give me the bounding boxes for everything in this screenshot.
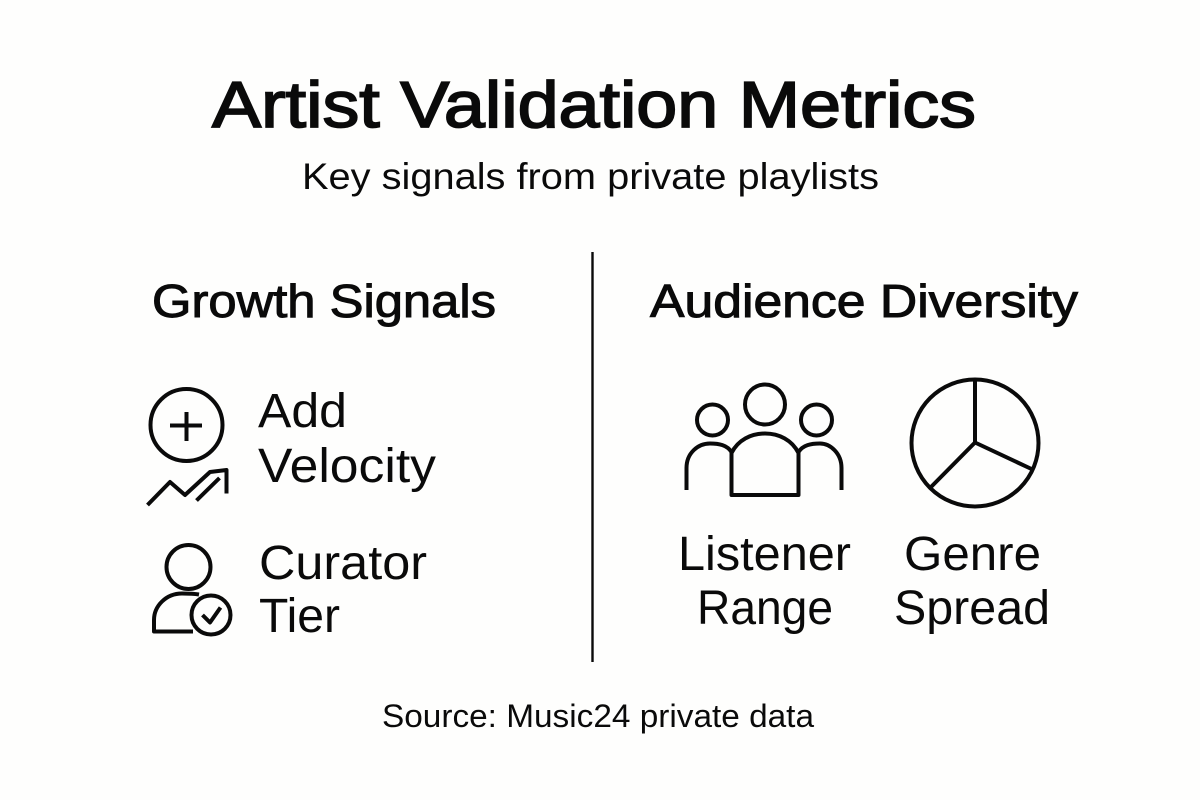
label: add velocity (258, 385, 436, 493)
icon: curator with check badge (154, 545, 230, 634)
label: add velocity: Add (258, 385, 347, 438)
label: add velocity: Velocity (258, 440, 436, 493)
label: curator tier (259, 537, 427, 643)
label: curator tier: Curator (259, 537, 427, 590)
label: listener range (678, 528, 851, 635)
heading: audience diversity: Audience Diversity (650, 275, 1078, 327)
panel: growth signals (148, 275, 496, 643)
subtitle: Key signals from private playlists (302, 156, 879, 197)
icon: add with rising trend (148, 389, 226, 505)
label: curator tier: Tier (259, 590, 340, 643)
label: listener range: Listener (678, 528, 851, 581)
title: Artist Validation Metrics (212, 68, 976, 141)
icon: genre pie chart (912, 380, 1038, 506)
label: genre spread: Genre (904, 528, 1041, 581)
icon: group of listeners (686, 384, 842, 495)
source note: Source: Music24 private data (382, 698, 814, 734)
center divider (591, 252, 594, 662)
label: genre spread (894, 528, 1050, 635)
label: listener range: Range (697, 582, 833, 635)
heading: growth signals: Growth Signals (152, 275, 496, 327)
panel: audience diversity (650, 275, 1078, 635)
label: genre spread: Spread (894, 582, 1050, 635)
